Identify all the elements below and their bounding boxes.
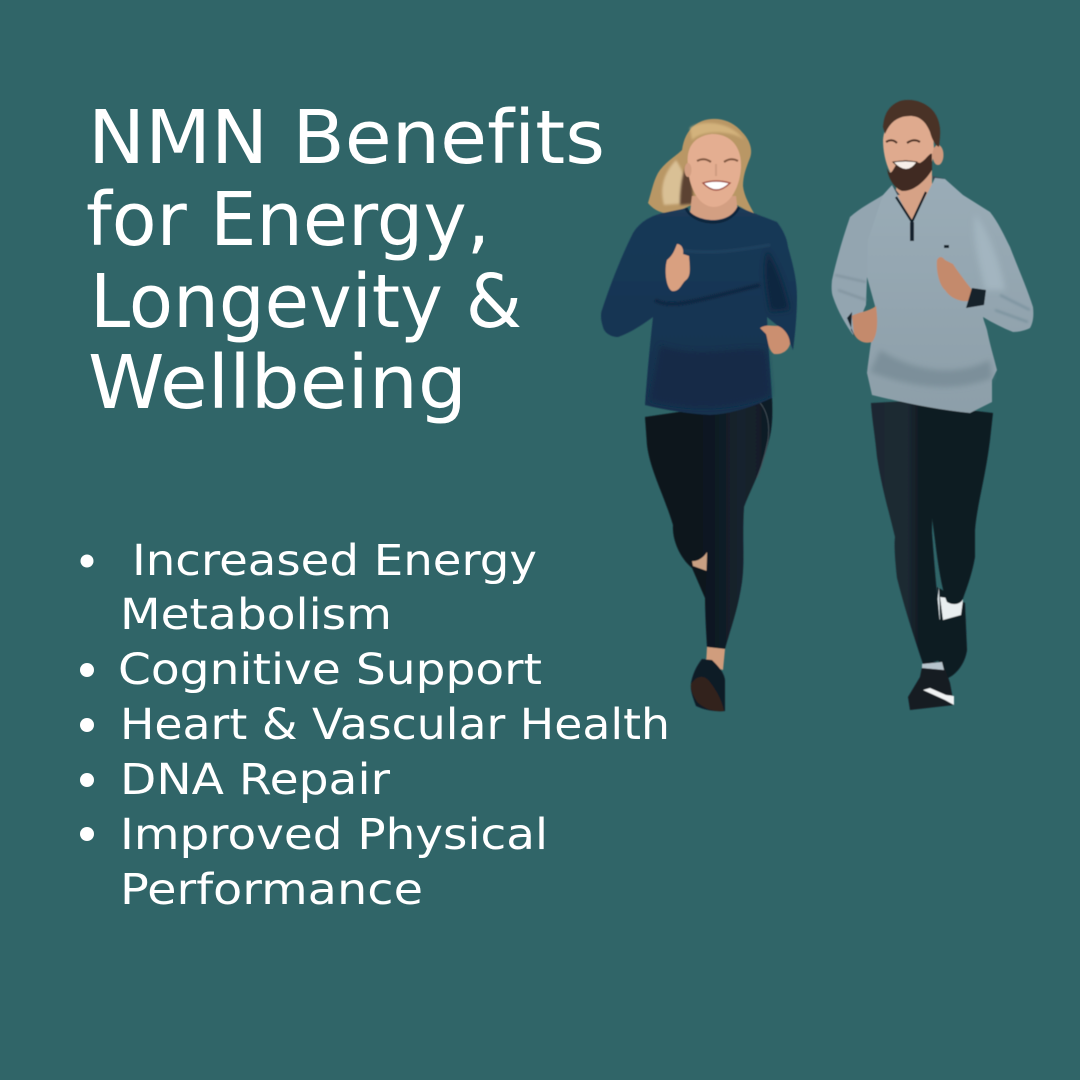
hair [883,100,940,147]
benefits list [80,536,670,915]
back leg pant [920,405,993,604]
title: Wellbeing [88,340,467,426]
hoodie torso [867,178,1033,413]
front leg pant [871,400,942,664]
bullet: DNA repair: DNA Repair [120,755,390,805]
face [688,134,741,207]
bullet: improved physical performance: Performance [120,865,423,915]
eyes and smile [886,140,920,143]
hoodie shading [870,350,992,387]
hair [648,119,755,215]
eyes and smile [697,159,738,162]
shirt shading [765,250,790,312]
shoe [706,647,725,670]
bullet: improved physical performance: Improved Physical [120,810,548,860]
bullet: cognitive support: Cognitive Support [118,645,542,695]
illustration: man running [832,100,1033,710]
title [86,95,605,426]
beard [887,154,932,191]
front shoe [908,662,954,710]
leggings [645,398,772,649]
title: for Energy, [86,177,490,263]
collar and zip [896,192,926,222]
sock [940,597,963,620]
title: NMN Benefits [88,95,605,181]
neck [895,165,932,222]
fists [937,257,972,301]
bullet: increased energy metabolism: Metabolism [120,590,392,640]
back leg lower [673,525,712,598]
back shoe [937,587,967,678]
bullet: heart and vascular health: Heart & Vascular Health [120,700,670,750]
face [883,114,934,188]
hoodie sleeve: near side [832,195,883,335]
bullet: improved physical performance [80,810,548,915]
long sleeve shirt [601,207,797,415]
neck and chest skin [690,196,738,223]
bullet: increased energy metabolism [80,536,537,640]
illustration: woman running [601,119,797,711]
hood lining [888,176,946,195]
title: Longevity & [90,259,522,345]
fists [666,244,690,291]
bullet: increased energy metabolism: Increased Energy [132,536,537,586]
